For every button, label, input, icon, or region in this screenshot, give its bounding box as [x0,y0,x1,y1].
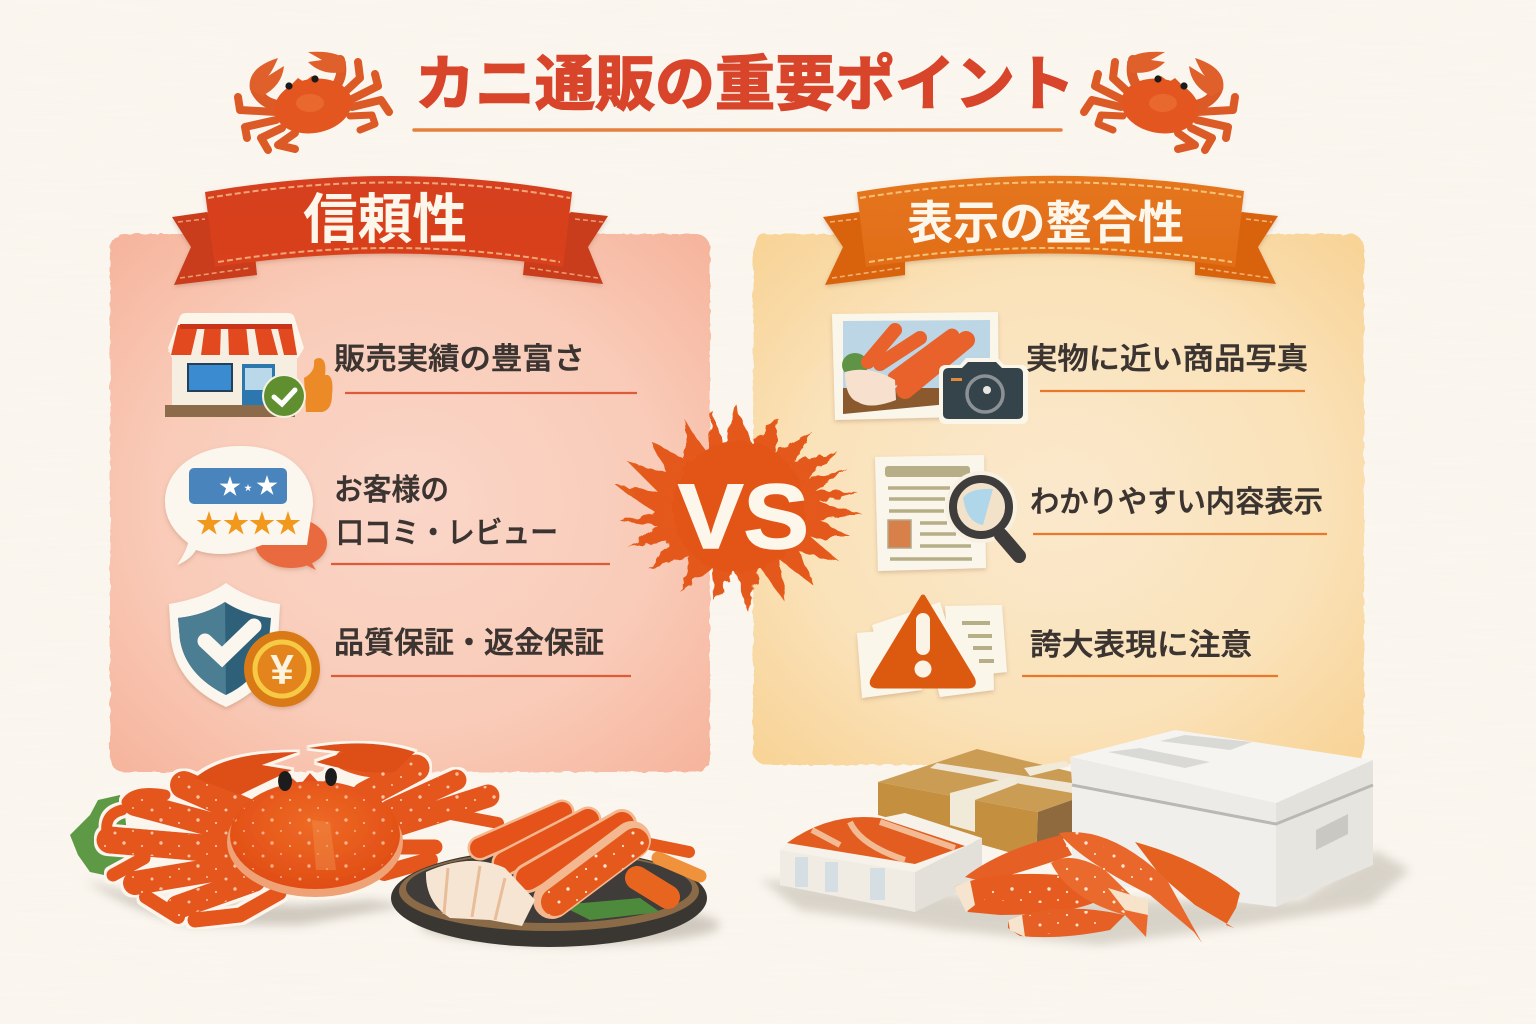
icon: store with thumbs up [165,313,332,418]
title: カニ通販の重要ポイント [415,51,1075,118]
VS text: VS [678,466,809,568]
ribbon: trust [172,176,608,285]
icon: warning triangle with papers [857,597,1007,698]
panel: display consistency background [753,234,1364,765]
illustration: packaged crab in boxes [760,730,1410,945]
icon: document and magnifier [875,455,1019,571]
floor shadow [760,850,1410,945]
title underline [414,128,1061,132]
ribbon title: display consistency: 表示の整合性 [907,197,1184,249]
icon: review speech bubbles [165,446,327,570]
label: beware exaggeration: 誇大表現に注意 [1030,629,1252,662]
yen sign: ¥ [270,646,294,693]
crab [107,743,498,920]
styrofoam box [1070,730,1373,907]
VS burst [615,403,862,612]
tray of crab meat [780,813,982,912]
crab claws [954,832,1240,943]
label: customer reviews: お客様の [334,474,449,507]
ribbon: display consistency [823,176,1278,285]
label: easy to understand display: わかりやすい内容表示 [1030,486,1323,519]
label: sales record: 販売実績の豊富さ [334,343,585,376]
label: customer reviews [334,474,558,550]
cast shadows [85,880,720,945]
label: quality guarantee: 品質保証・返金保証 [334,627,604,660]
label: customer reviews: 口コミ・レビュー [336,517,558,550]
crab legs on plate [426,812,700,926]
ribbon title: trust: 信頼性 [303,190,467,250]
icon: crab right [1084,52,1235,150]
label: photo close to real product: 実物に近い商品写真 [1026,343,1308,376]
cardboard box [878,749,1072,860]
panel: trust background [110,234,710,772]
plate [391,849,707,947]
parsley [70,795,130,878]
illustration: whole crab and plate of legs [70,743,720,947]
icon: shield and yen coin [169,583,320,707]
icon: product photo and camera [832,312,1028,424]
icon: crab left [238,52,389,150]
